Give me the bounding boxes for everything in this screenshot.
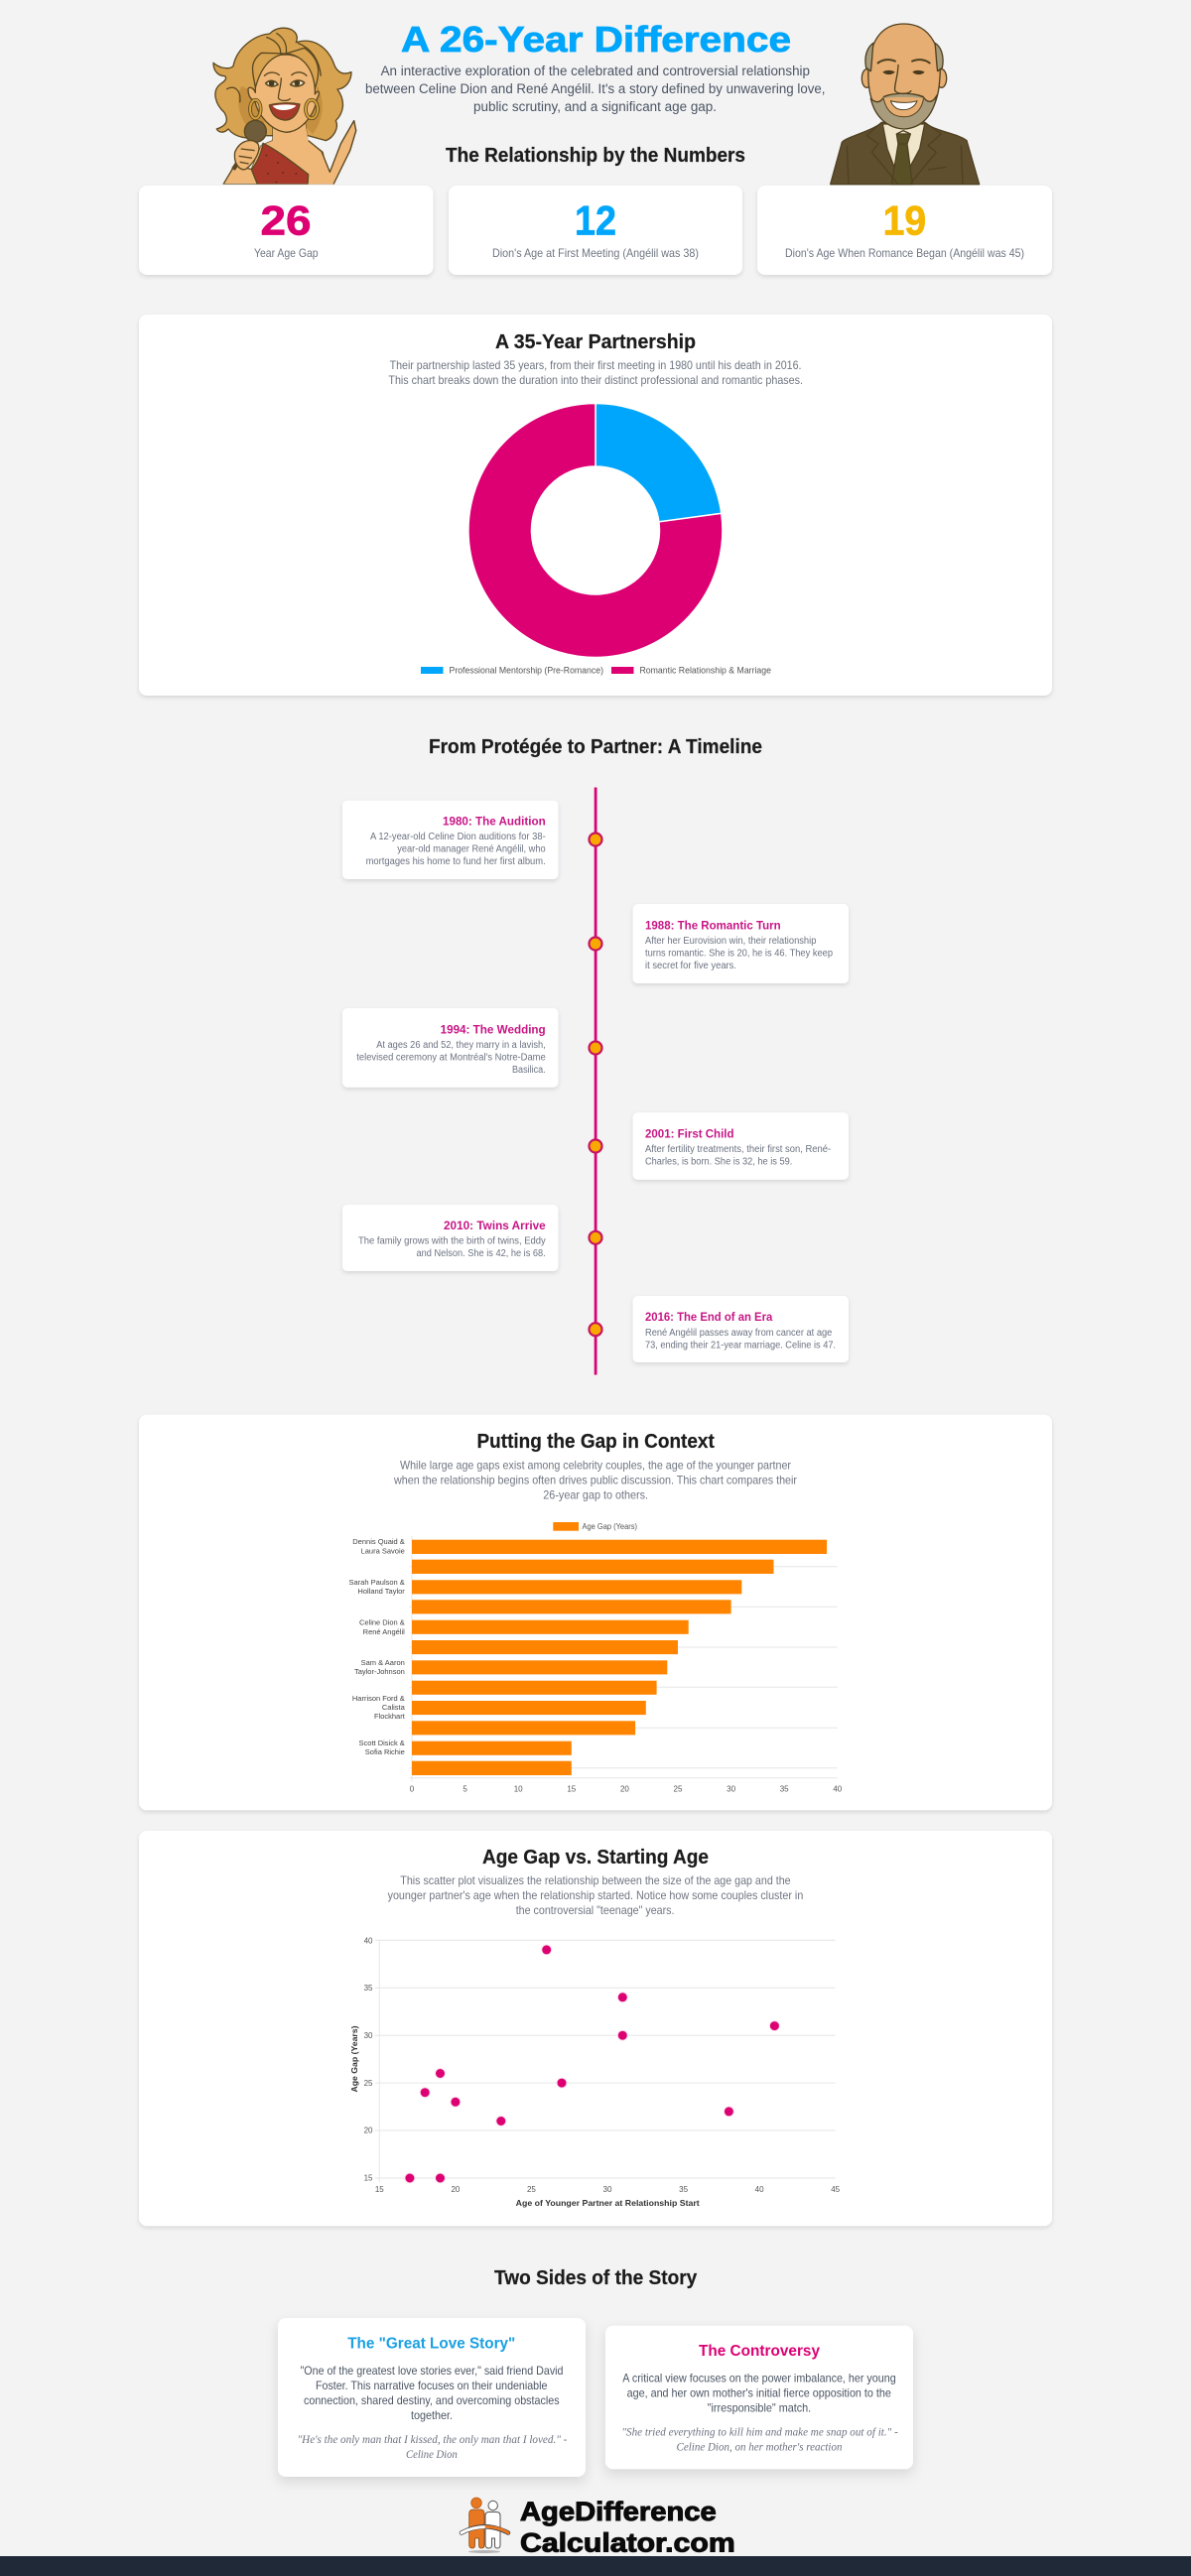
heading: two sides: Two Sides of the Story	[494, 2267, 698, 2289]
timeline card: 1994: Basilica.	[512, 1065, 546, 1076]
value axis: 10	[514, 1784, 523, 1794]
heading: A 35-Year Partnership	[495, 331, 696, 353]
stat number 19: 19	[883, 196, 926, 244]
card text: age, and her own mother's initial fierce opposition to the	[627, 2385, 891, 2399]
category labels: René Angélil	[363, 1627, 405, 1636]
timeline card: 1994: televised ceremony at Montréal's Notre-Dame	[356, 1052, 546, 1064]
y axis labels: 40	[364, 1937, 373, 1945]
chart legend	[421, 665, 771, 675]
chart legend: Age Gap (Years)	[582, 1522, 637, 1531]
timeline card: 2001	[633, 1112, 849, 1180]
description	[388, 1873, 803, 1917]
category labels: Laura Savoie	[361, 1546, 405, 1556]
y axis title: Age Gap (Years)	[349, 2025, 359, 2092]
heading: Putting the Gap in Context	[476, 1431, 715, 1453]
title: A 26-Year Difference	[401, 19, 791, 60]
timeline card: 1994	[342, 1008, 558, 1088]
timeline card: 1988: 1988: The Romantic Turn	[645, 919, 781, 933]
timeline card: 2016: 73, ending their 21-year marriage. Celine is 47.	[645, 1340, 836, 1352]
timeline card: 1988	[633, 904, 849, 983]
quote	[621, 2425, 898, 2454]
x axis title: Age of Younger Partner at Relationship Start	[516, 2198, 700, 2208]
timeline card: 2001: 2001: First Child	[645, 1127, 734, 1141]
data points	[405, 1945, 779, 2183]
timeline card: 1988: it secret for five years.	[645, 961, 736, 971]
card text	[622, 2371, 896, 2414]
category labels: Sarah Paulson &	[349, 1578, 405, 1587]
value axis: 25	[674, 1784, 683, 1794]
intro text: between Celine Dion and René Angélil. It's a story defined by unwavering love,	[365, 81, 826, 96]
stat label: Dion's Age at First Meeting (Angélil was 38)	[492, 246, 699, 260]
bars	[412, 1540, 827, 1775]
category labels: Sam & Aaron	[361, 1658, 405, 1667]
panel: the controversy	[605, 2326, 913, 2469]
timeline card: 1980: year-old manager René Angélil, who	[397, 843, 546, 855]
face	[248, 55, 319, 132]
body	[251, 121, 356, 185]
card text: "irresponsible" match.	[708, 2400, 811, 2414]
quote: Celine Dion, on her mother's reaction	[677, 2440, 842, 2454]
value axis: 5	[463, 1784, 467, 1794]
category labels: Calista	[382, 1703, 406, 1712]
description	[388, 358, 803, 387]
header	[213, 19, 980, 185]
x axis labels	[375, 2185, 841, 2194]
description: This chart breaks down the duration into their distinct professional and romantic phases.	[388, 373, 803, 387]
card title: The "Great Love Story"	[347, 2336, 515, 2352]
category labels: Flockhart	[374, 1712, 406, 1721]
icon: Celine Dion caricature	[213, 28, 356, 185]
x axis labels: 35	[679, 2185, 689, 2194]
scatter plot	[349, 1937, 841, 2208]
category labels: Sofia Richie	[365, 1747, 405, 1756]
x axis labels: 15	[375, 2185, 384, 2194]
y axis labels: 20	[364, 2125, 373, 2135]
timeline card: 2010	[342, 1205, 558, 1271]
timeline card: 1980: mortgages his home to fund her first album.	[366, 856, 546, 867]
category labels: Dennis Quaid &	[352, 1537, 405, 1546]
timeline marker	[590, 1139, 601, 1153]
panel: putting the gap in context	[139, 1415, 1052, 1810]
timeline card: 2001: Charles, is born. She is 32, he is 59.	[645, 1157, 792, 1167]
stat number 12: 12	[575, 196, 616, 244]
x axis labels: 20	[451, 2185, 461, 2194]
intro text	[365, 64, 826, 114]
card text: Foster. This narrative focuses on their undeniable	[316, 2379, 548, 2392]
panel: the great love story	[278, 2318, 586, 2477]
icon: couple logo mark	[462, 2498, 508, 2553]
heading: the numbers: The Relationship by the Numbers	[446, 145, 745, 167]
panel: age gap vs starting age	[139, 1831, 1052, 2226]
timeline	[342, 788, 849, 1375]
card text: "One of the greatest love stories ever," said friend David	[300, 2364, 564, 2378]
timeline card: 1980: 1980: The Audition	[443, 814, 546, 828]
value axis: 15	[567, 1784, 577, 1794]
quote: Celine Dion	[406, 2447, 458, 2461]
category labels: Holland Taylor	[357, 1587, 405, 1596]
stat number 26: 26	[260, 196, 312, 244]
card title: The Controversy	[699, 2343, 820, 2360]
timeline card: 2010: 2010: Twins Arrive	[444, 1219, 546, 1232]
panel: 35-year partnership	[139, 315, 1052, 696]
intro text: An interactive exploration of the celebrated and controversial relationship	[381, 64, 810, 78]
bar chart	[349, 1522, 843, 1794]
value axis	[410, 1784, 843, 1794]
category labels: Harrison Ford &	[352, 1694, 405, 1703]
quote: "She tried everything to kill him and make me snap out of it." -	[621, 2425, 898, 2439]
description: when the relationship begins often drives public discussion. This chart compares their	[393, 1473, 797, 1486]
timeline marker	[590, 937, 601, 951]
description: the controversial "teenage" years.	[516, 1903, 675, 1917]
timeline card: 2010: and Nelson. She is 42, he is 68.	[417, 1248, 546, 1259]
x axis labels: 30	[603, 2185, 612, 2194]
stat label: Year Age Gap	[254, 246, 319, 260]
timeline card: 1980: A 12-year-old Celine Dion auditions for 38-	[370, 832, 546, 842]
timeline marker	[590, 1323, 601, 1336]
description: younger partner's age when the relationship started. Notice how some couples cluster in	[388, 1888, 803, 1902]
timeline card: 1988: After her Eurovision win, their relationship	[645, 936, 817, 947]
footer bar	[0, 2556, 1191, 2576]
panel: stat 19	[757, 186, 1052, 275]
y axis labels: 25	[364, 2079, 373, 2088]
y axis labels: 15	[364, 2173, 373, 2183]
category labels	[349, 1537, 406, 1756]
donut chart	[468, 403, 723, 657]
logo wordmark: Calculator.com	[520, 2528, 735, 2558]
card text: connection, shared destiny, and overcoming obstacles	[304, 2393, 560, 2407]
x axis labels: 25	[527, 2185, 536, 2194]
heading: timeline: From Protégée to Partner: A Timeline	[429, 736, 762, 758]
panel: stat 12	[449, 186, 742, 275]
card text: together.	[411, 2408, 453, 2422]
description: Their partnership lasted 35 years, from their first meeting in 1980 until his death in 2016.	[390, 358, 802, 372]
intro text: public scrutiny, and a significant age gap.	[473, 99, 717, 114]
logo wordmark	[520, 2497, 735, 2558]
value axis: 40	[833, 1784, 843, 1794]
logo	[462, 2497, 735, 2558]
card text: A critical view focuses on the power imbalance, her young	[622, 2371, 896, 2384]
stat label: Dion's Age When Romance Began (Angélil was 45)	[785, 246, 1024, 260]
timeline card: 2016	[633, 1296, 849, 1362]
category labels: Scott Disick &	[359, 1739, 405, 1747]
timeline card: 2001: After fertility treatments, their first son, René-	[645, 1144, 831, 1155]
value axis: 30	[727, 1784, 736, 1794]
description: 26-year gap to others.	[543, 1488, 648, 1502]
description: This scatter plot visualizes the relationship between the size of the age gap and the	[400, 1873, 791, 1887]
timeline card: 2016: René Angélil passes away from cancer at age	[645, 1328, 833, 1339]
quote	[298, 2432, 567, 2461]
timeline marker	[590, 1231, 601, 1244]
chart legend	[553, 1522, 637, 1531]
timeline card: 1988: turns romantic. She is 20, he is 46. They keep	[645, 949, 833, 959]
value axis: 35	[780, 1784, 789, 1794]
panel: stat 26	[139, 186, 433, 275]
category labels: Taylor-Johnson	[354, 1667, 405, 1676]
chart legend: Professional Mentorship (Pre-Romance)	[449, 665, 603, 675]
card text	[300, 2364, 564, 2422]
x axis labels: 45	[831, 2185, 841, 2194]
timeline card: 1994: At ages 26 and 52, they marry in a lavish,	[376, 1040, 546, 1051]
description	[393, 1459, 797, 1502]
y axis labels: 30	[364, 2031, 373, 2040]
value axis: 0	[410, 1784, 415, 1794]
timeline marker	[590, 1042, 601, 1054]
timeline marker	[590, 834, 601, 845]
y axis labels	[364, 1937, 373, 2183]
logo wordmark: AgeDifference	[520, 2497, 717, 2526]
timeline card: 1980	[342, 801, 558, 879]
timeline spine	[595, 788, 597, 1375]
chart legend: Romantic Relationship & Marriage	[639, 665, 771, 675]
quote: "He's the only man that I kissed, the only man that I loved." -	[298, 2432, 567, 2446]
category labels: Celine Dion &	[359, 1617, 405, 1627]
timeline card: 2010: The family grows with the birth of twins, Eddy	[358, 1236, 546, 1246]
value axis: 20	[620, 1784, 629, 1794]
timeline card: 1994: 1994: The Wedding	[441, 1022, 546, 1036]
timeline card: 2016: 2016: The End of an Era	[645, 1310, 773, 1324]
y axis labels: 35	[364, 1984, 373, 1993]
description: While large age gaps exist among celebrity couples, the age of the younger partner	[400, 1459, 791, 1473]
x axis labels: 40	[755, 2185, 764, 2194]
heading: Age Gap vs. Starting Age	[482, 1847, 709, 1868]
icon: René Angélil caricature	[831, 24, 980, 185]
